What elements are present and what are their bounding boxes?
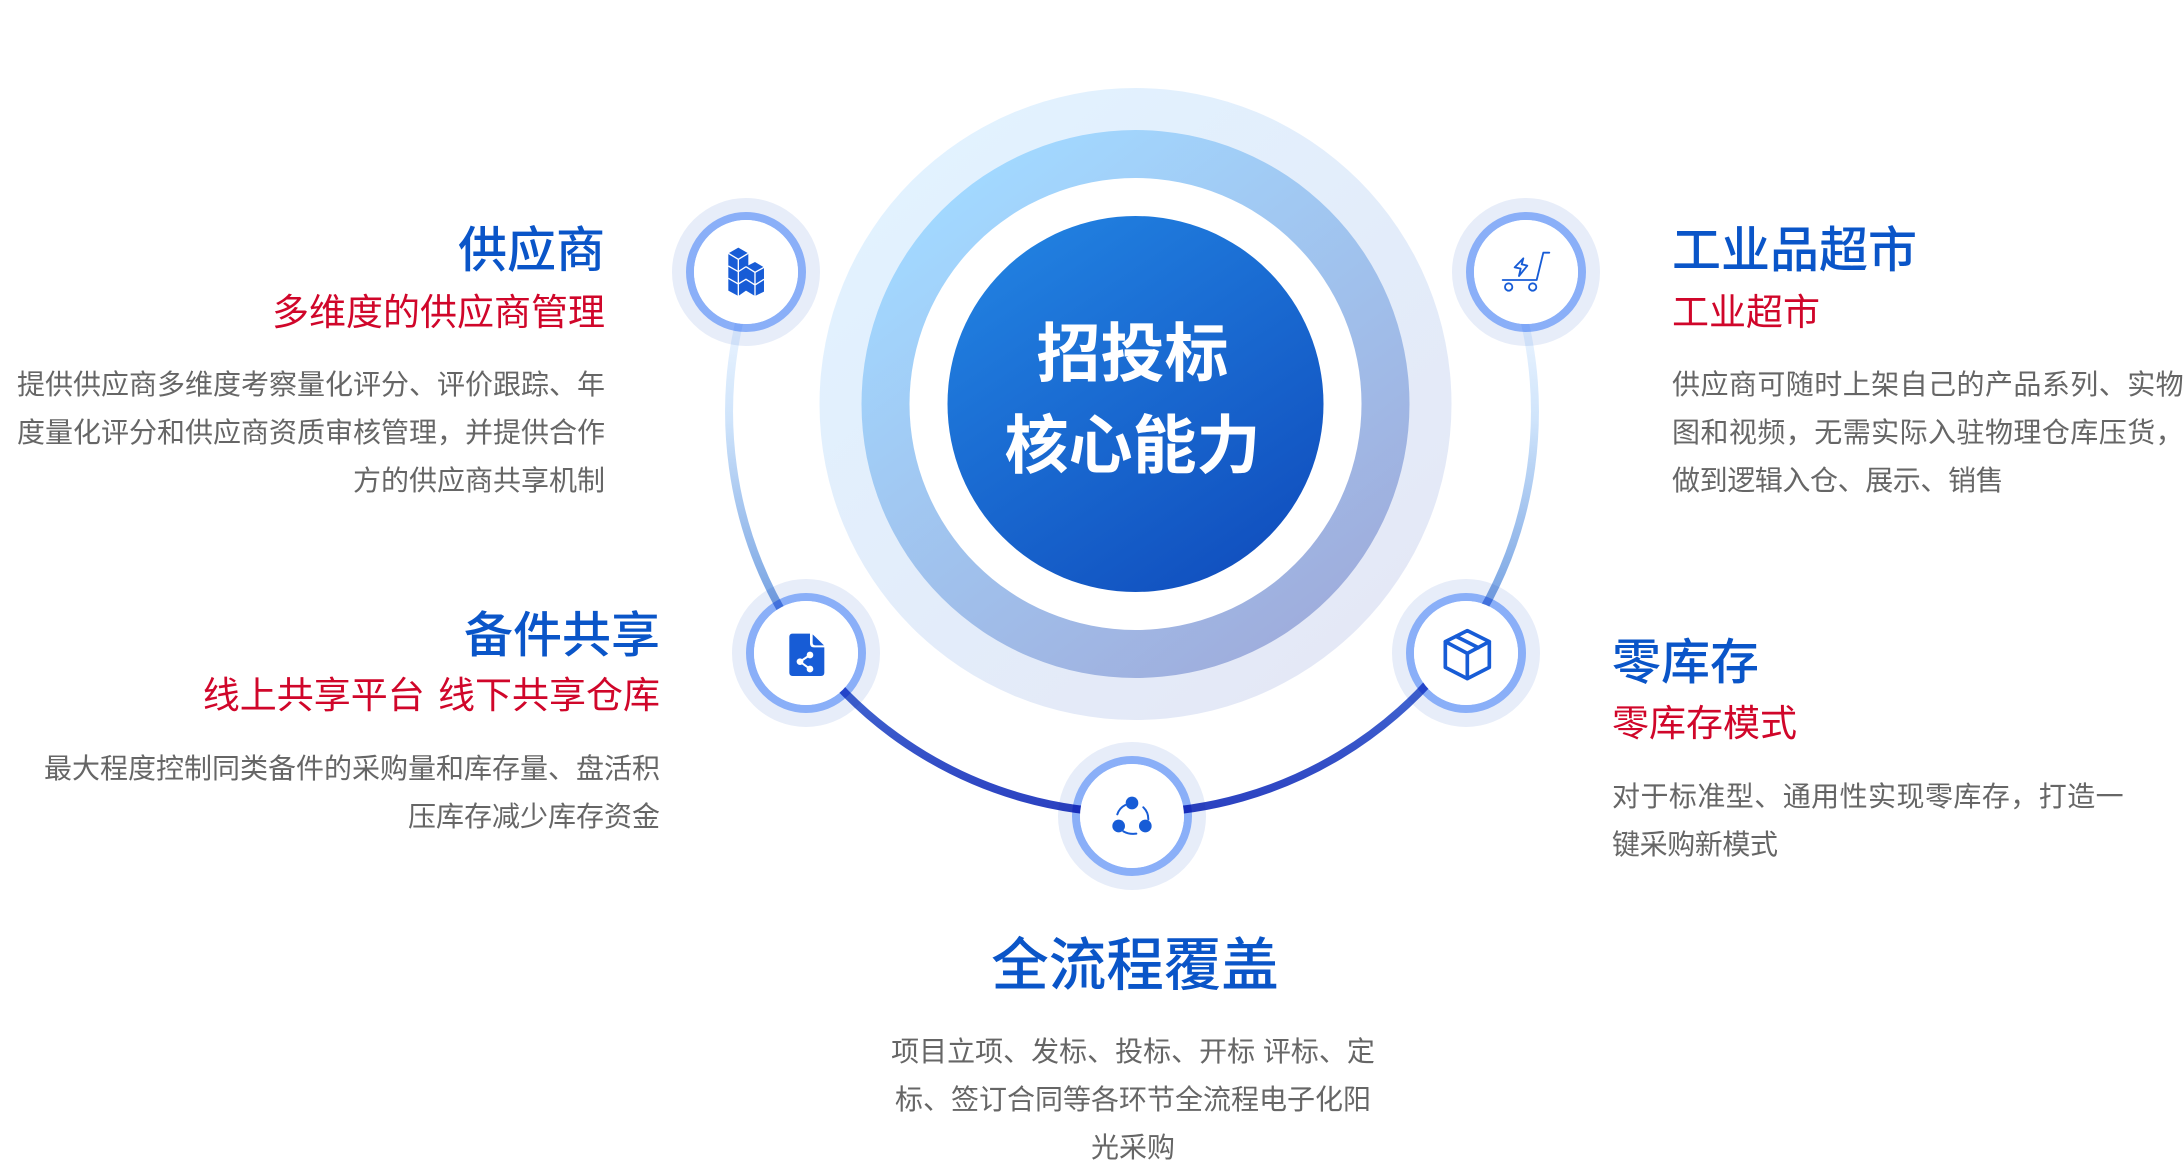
center title: [1004, 318, 1260, 482]
description: 提供供应商多维度考察量化评分、评价跟踪、年: [17, 369, 605, 400]
icon: process cycle: [1112, 797, 1152, 834]
heading: 零库存: [1612, 636, 1759, 690]
panel: zero inventory: [1612, 636, 2124, 860]
description: 标、签订合同等各环节全流程电子化阳: [895, 1084, 1371, 1115]
icon: shared file: [789, 634, 824, 676]
description: 键采购新模式: [1612, 829, 1778, 860]
description: 最大程度控制同类备件的采购量和库存量、盘活积: [44, 752, 660, 784]
heading: 供应商: [458, 224, 605, 278]
description: [1672, 369, 2184, 496]
connecting arcs: [729, 300, 1535, 813]
description: 方的供应商共享机制: [353, 465, 605, 496]
description: [17, 369, 605, 496]
description: [1612, 781, 2124, 860]
heading: 全流程覆盖: [991, 934, 1279, 998]
description: 图和视频，无需实际入驻物理仓库压货，: [1672, 417, 2184, 448]
center title: 招投标: [1036, 318, 1228, 390]
icon: stacked blocks: [728, 248, 764, 296]
description: [891, 1036, 1375, 1163]
description: 供应商可随时上架自己的产品系列、实物: [1672, 369, 2184, 400]
description: 光采购: [1091, 1132, 1175, 1163]
panel: suppliers: [17, 224, 605, 496]
node: zero inventory: [1399, 586, 1533, 720]
panel: full process coverage: [891, 934, 1375, 1163]
panel: industrial supermarket: [1672, 224, 2184, 496]
panel: spare parts sharing: [44, 608, 660, 832]
description: 度量化评分和供应商资质审核管理，并提供合作: [17, 417, 605, 448]
description: 对于标准型、通用性实现零库存，打造一: [1612, 781, 2124, 812]
node: spare parts sharing: [739, 586, 873, 720]
description: [44, 752, 660, 832]
node: industrial supermarket: [1459, 205, 1593, 339]
description: 压库存减少库存资金: [408, 800, 660, 832]
concentric hub: [820, 88, 1452, 720]
node: full process: [1065, 749, 1199, 883]
subheading: 多维度的供应商管理: [272, 292, 605, 332]
description: 做到逻辑入仓、展示、销售: [1672, 465, 2003, 496]
icon: cart with bolt: [1503, 253, 1549, 291]
description: 项目立项、发标、投标、开标 评标、定: [891, 1036, 1375, 1067]
icon: parcel box: [1445, 631, 1489, 679]
subheading: 零库存模式: [1612, 702, 1797, 744]
subheading: 线上共享平台 线下共享仓库: [203, 675, 660, 716]
subheading: 工业超市: [1672, 292, 1820, 332]
heading: 工业品超市: [1672, 224, 1917, 278]
heading: 备件共享: [464, 608, 660, 662]
node: suppliers: [679, 205, 813, 339]
center title: 核心能力: [1004, 410, 1260, 482]
